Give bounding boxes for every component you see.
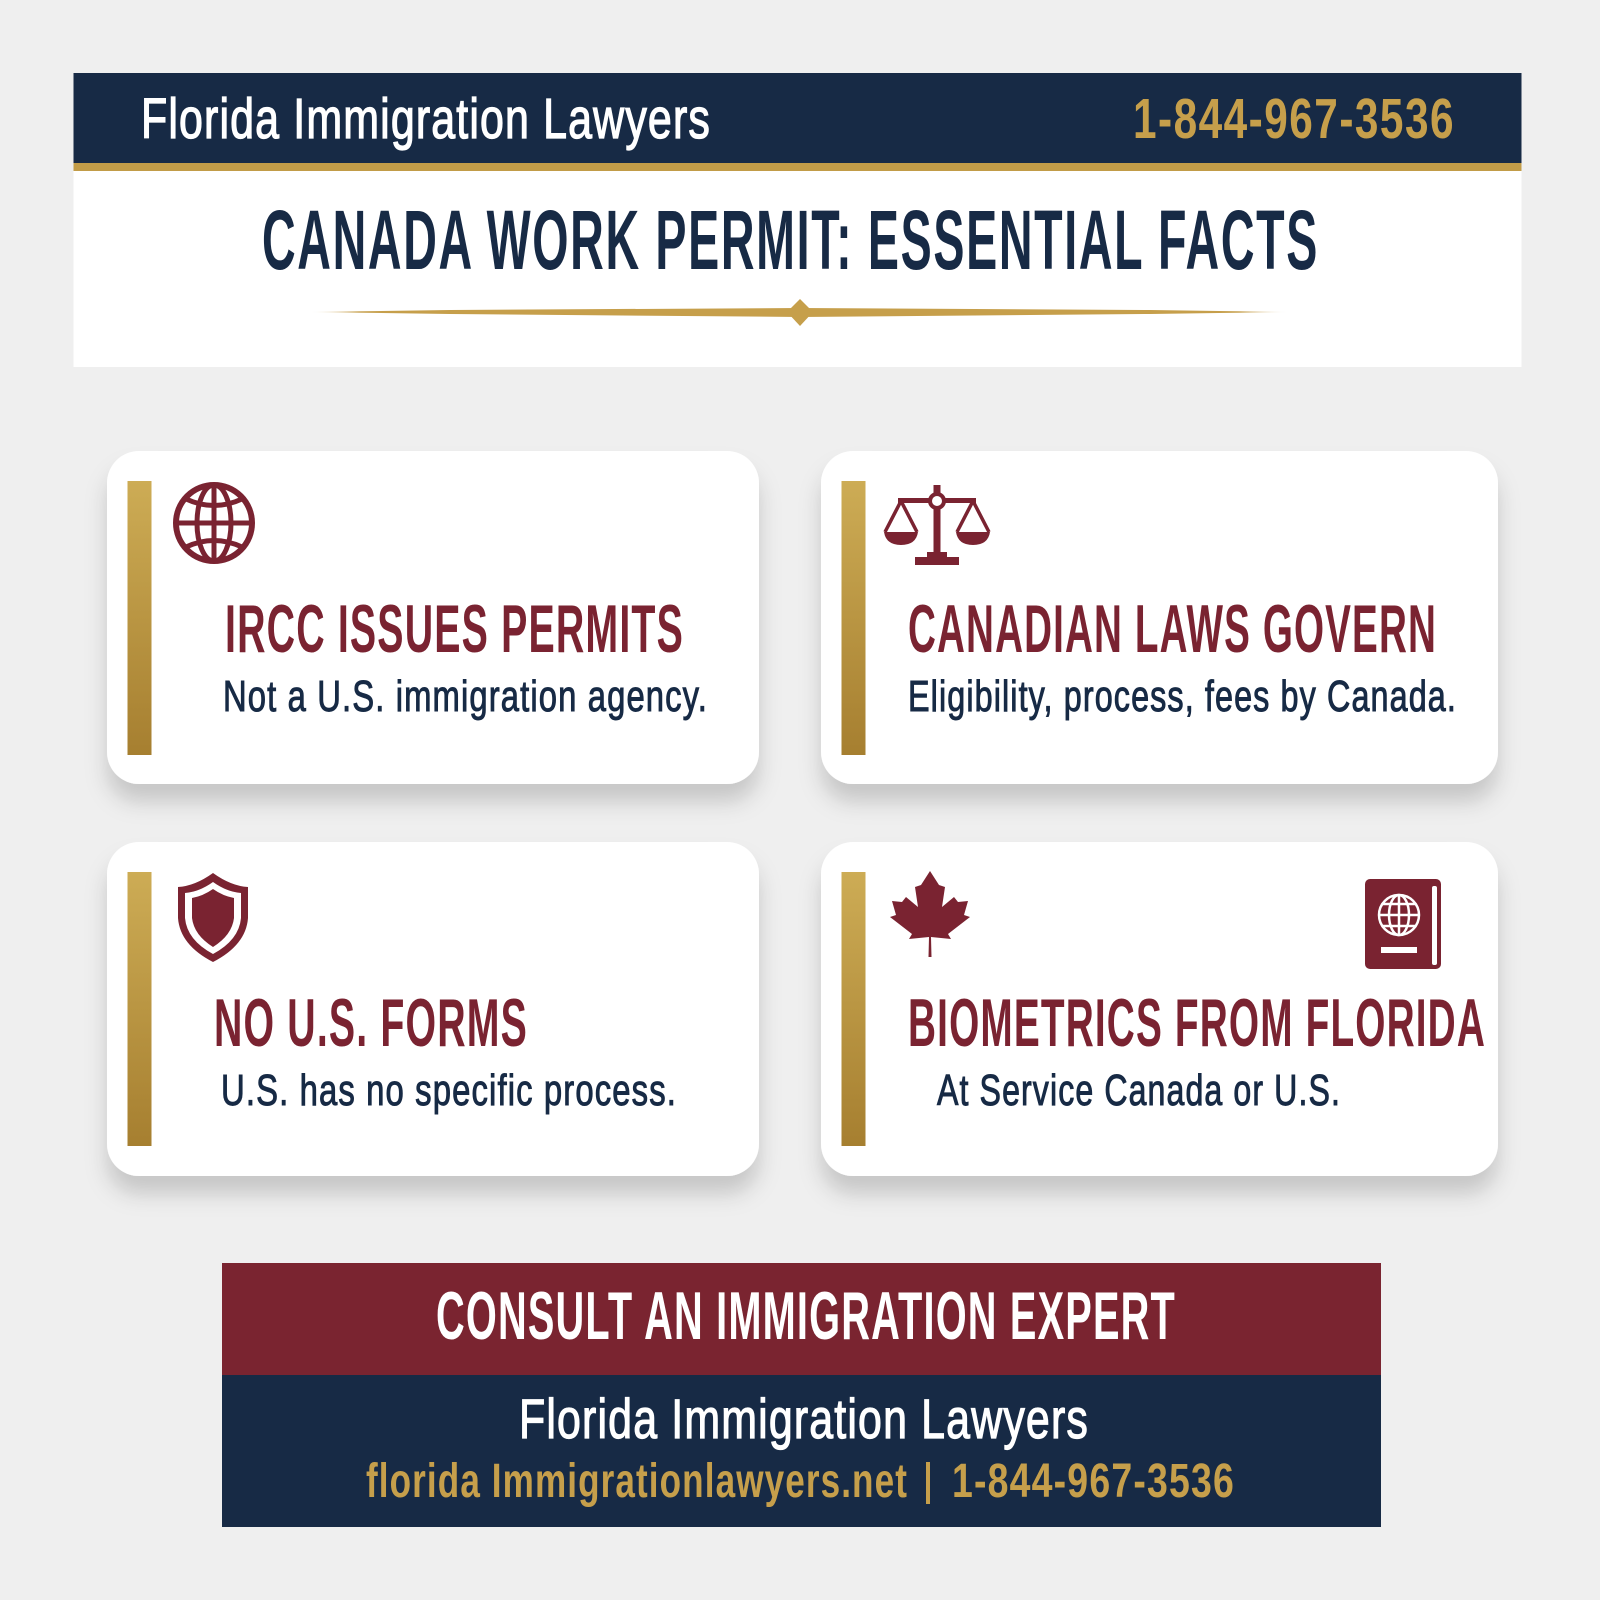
firm name: Florida Immigration Lawyers bbox=[519, 1387, 1089, 1450]
website and phone: florida Immigrationlawyers.net bbox=[366, 1455, 908, 1508]
header band bbox=[74, 73, 1522, 163]
card heading: IRCC ISSUES PERMITS bbox=[225, 591, 684, 667]
gold rule bbox=[74, 163, 1522, 171]
call to action panel: 1-844-967-3536 bbox=[952, 1455, 1235, 1508]
card text: Not a U.S. immigration agency. bbox=[223, 672, 708, 721]
card heading: NO U.S. FORMS bbox=[214, 985, 528, 1061]
icon: globe bbox=[176, 485, 252, 561]
firm name: Florida Immigration Lawyers bbox=[141, 87, 711, 151]
icon: maple leaf bbox=[890, 871, 970, 957]
card text: U.S. has no specific process. bbox=[221, 1066, 677, 1115]
call to action panel bbox=[222, 1263, 1381, 1527]
title divider with diamond bbox=[310, 299, 1288, 326]
card: biometrics from Florida bbox=[821, 842, 1498, 1176]
card: IRCC issues permits bbox=[107, 451, 759, 784]
card text: At Service Canada or U.S. bbox=[937, 1066, 1341, 1115]
title panel bbox=[74, 171, 1522, 367]
card: Canadian laws govern bbox=[821, 451, 1498, 784]
icon: shield bbox=[178, 873, 248, 962]
icon: scales of justice bbox=[884, 485, 990, 565]
card: no U.S. forms bbox=[107, 842, 759, 1176]
icon: passport bbox=[1365, 879, 1441, 969]
header phone number: 1-844-967-3536 bbox=[1133, 87, 1455, 151]
